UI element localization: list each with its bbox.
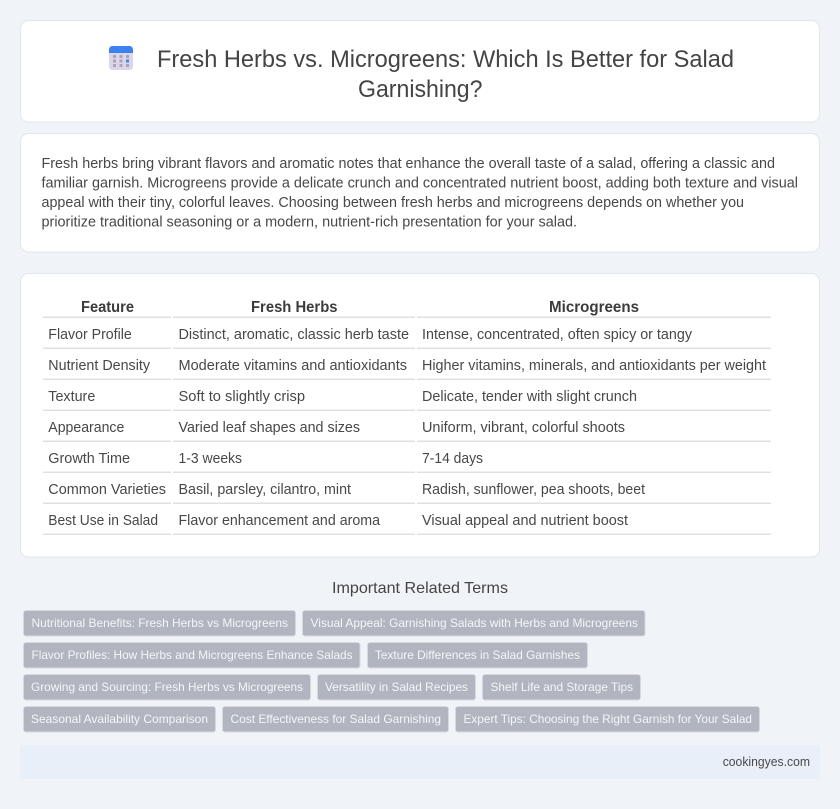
intro text: prioritize traditional seasoning or a modern, nutrient-rich presentation for your salad. — [42, 214, 577, 230]
tag row 1: Visual Appeal: Garnishing Salads with Herbs and Microgreens — [310, 616, 638, 630]
row: common varieties — [48, 482, 645, 498]
row: nutrient density: Nutrient Density — [48, 358, 151, 374]
title: Garnishing? — [358, 76, 482, 103]
table column headers: Microgreens — [549, 299, 639, 316]
tag row 4 — [24, 706, 760, 732]
row: appearance — [48, 420, 625, 436]
row: best use in salad: Best Use in Salad — [48, 513, 158, 529]
row: texture: Texture — [48, 389, 95, 405]
panel: comparison table — [20, 274, 820, 557]
tag row 3 — [24, 674, 640, 700]
row: nutrient density: Moderate vitamins and antioxidants — [178, 358, 407, 374]
related term tags — [24, 610, 760, 732]
row: texture: Soft to slightly crisp — [178, 389, 305, 405]
row: appearance: Uniform, vibrant, colorful shoots — [422, 420, 625, 436]
tag row 4: Seasonal Availability Comparison — [31, 712, 208, 726]
row: appearance: Appearance — [48, 420, 124, 436]
tag row 2: Texture Differences in Salad Garnishes — [375, 648, 580, 662]
row: growth time: 1-3 weeks — [178, 451, 242, 467]
intro text — [42, 156, 798, 230]
row: best use in salad: Flavor enhancement and aroma — [178, 513, 380, 529]
row: flavor profile — [48, 327, 693, 343]
row: flavor profile: Flavor Profile — [48, 327, 132, 343]
row: flavor profile: Intense, concentrated, often spicy or tangy — [422, 327, 693, 343]
tag row 2: Flavor Profiles: How Herbs and Microgreens Enhance Salads — [32, 648, 352, 662]
icon: calendar — [109, 46, 133, 70]
row: growth time: Growth Time — [48, 451, 130, 467]
title — [157, 46, 734, 103]
tag row 1 — [24, 610, 645, 636]
table column headers: Fresh Herbs — [251, 299, 338, 316]
footer — [20, 745, 820, 779]
tag row 4: Cost Effectiveness for Salad Garnishing — [230, 712, 441, 726]
tag row 1: Nutritional Benefits: Fresh Herbs vs Microgreens — [32, 616, 288, 630]
intro text: familiar garnish. Microgreens provide a delicate crunch and concentrated nutrient boost, adding both texture and visual — [42, 176, 798, 192]
row: texture — [48, 389, 637, 405]
row: common varieties: Basil, parsley, cilantro, mint — [178, 482, 351, 498]
tag row 2 — [24, 642, 588, 668]
intro text: appeal with their tiny, colorful leaves. Choosing between fresh herbs and microgreens depends on whether you — [42, 195, 744, 211]
tag row 3: Versatility in Salad Recipes — [325, 680, 468, 694]
title: Fresh Herbs vs. Microgreens: Which Is Better for Salad — [157, 46, 734, 73]
row: appearance: Varied leaf shapes and sizes — [178, 420, 360, 436]
row: best use in salad: Visual appeal and nutrient boost — [422, 513, 628, 529]
row: common varieties: Radish, sunflower, pea shoots, beet — [422, 482, 645, 498]
intro text: Fresh herbs bring vibrant flavors and aromatic notes that enhance the overall taste of a salad, offering a classic and — [42, 156, 775, 172]
row: flavor profile: Distinct, aromatic, classic herb taste — [178, 327, 409, 343]
row: growth time — [48, 451, 483, 467]
tag row 4: Expert Tips: Choosing the Right Garnish for Your Salad — [464, 712, 752, 726]
tag row 3: Growing and Sourcing: Fresh Herbs vs Microgreens — [31, 680, 303, 694]
row: nutrient density: Higher vitamins, minerals, and antioxidants per weight — [422, 358, 766, 374]
footer: cookingyes.com — [723, 754, 810, 769]
row: nutrient density — [48, 358, 766, 374]
row: best use in salad — [48, 513, 628, 529]
tag row 3: Shelf Life and Storage Tips — [490, 680, 633, 694]
row: common varieties: Common Varieties — [48, 482, 166, 498]
heading: related terms: Important Related Terms — [332, 580, 508, 597]
panel: header — [20, 20, 820, 122]
row: texture: Delicate, tender with slight crunch — [422, 389, 637, 405]
table column headers — [81, 299, 639, 316]
panel: introduction — [20, 134, 820, 252]
table column headers: Feature — [81, 299, 134, 316]
row: growth time: 7-14 days — [422, 451, 483, 467]
